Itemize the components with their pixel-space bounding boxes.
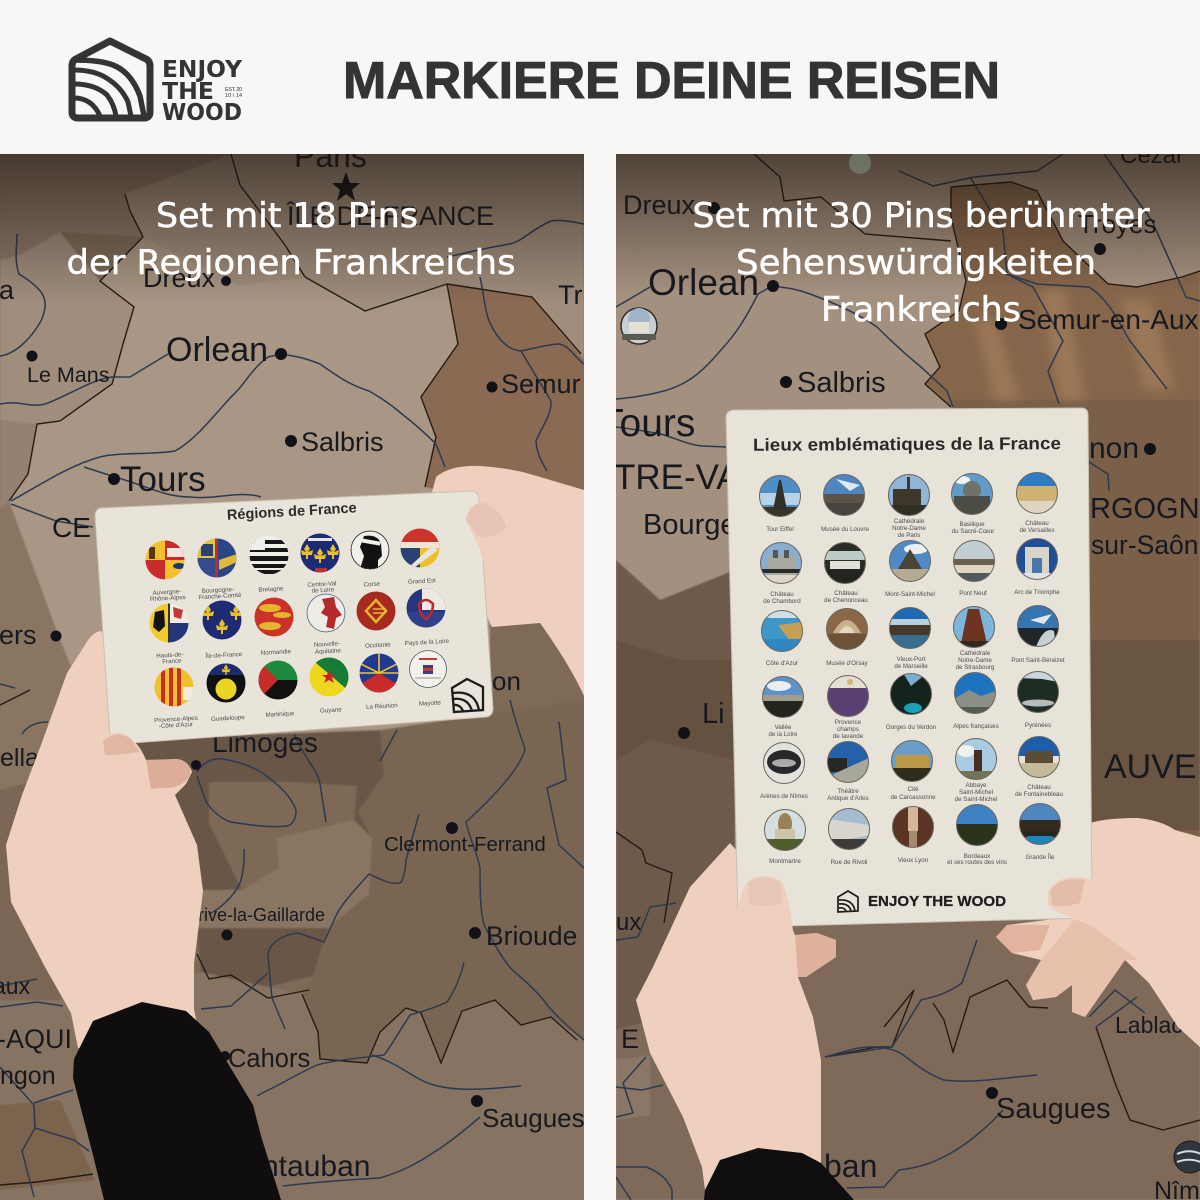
landmark labels: Vieux Lyon [898, 857, 929, 864]
icon: house logo [838, 891, 858, 912]
map labels and city dots: Dreux [623, 190, 696, 220]
wordmark: ENJOY [162, 57, 242, 83]
overlay text, right [692, 196, 1150, 330]
card: Lieux emblématiques de la France [726, 408, 1092, 927]
region labels: Normandie [261, 648, 292, 657]
pin: La Réunion [359, 653, 399, 693]
map pin at lower right [1174, 1141, 1200, 1173]
pin: Montmartre [764, 809, 806, 851]
map labels and city dots: Semur-en-Aux [1018, 304, 1199, 335]
map labels and city dots: AUVE [1104, 748, 1197, 786]
wordmark: THE [162, 79, 214, 105]
landmark labels: Château [770, 591, 794, 598]
map labels and city dots [0, 138, 585, 1183]
map labels and city dots: E [621, 1024, 639, 1054]
landmark labels: de Marseille [894, 663, 928, 670]
region labels: Franche-Comté [198, 592, 242, 601]
landmark labels: Vallée [775, 724, 792, 731]
overlay text, right: Set mit 30 Pins berühmter [692, 196, 1150, 236]
landmark labels: Notre-Dame [892, 525, 926, 532]
pin: Musée d'Orsay [826, 608, 868, 650]
region labels: Grand Est [408, 577, 436, 586]
panel: right photo, landmark pin set [600, 142, 1200, 1200]
map labels and city dots: Tr [558, 280, 582, 310]
landmark labels: Arènes de Nîmes [760, 793, 808, 800]
landmark labels: Côte d'Azur [766, 660, 798, 667]
landmark labels: Cathédrale [894, 518, 925, 525]
map labels and city dots: Dreux [143, 263, 216, 293]
map labels and city dots: Semur [501, 369, 581, 399]
landmark labels: Vieux-Port [897, 656, 926, 663]
overlay text, left: Set mit 18 Pins [156, 196, 418, 236]
map labels and city dots: Lablac [1115, 1012, 1183, 1038]
region labels: Île-de-France [204, 651, 243, 660]
pin: Théâtre Antique d'Arles [827, 741, 869, 783]
region labels: Provence-Alpes [154, 715, 198, 724]
thumb over card, right [466, 502, 506, 563]
pin: Nouvelle-Aquitaine [306, 593, 346, 633]
pin: Cathédrale Notre-Dame de Paris [888, 474, 930, 516]
landmark labels: Antique d'Arles [827, 795, 869, 802]
pin: Vallée de la Loire [762, 676, 804, 718]
landmark labels: de lavande [833, 733, 864, 740]
map labels and city dots: Saugues [996, 1093, 1110, 1125]
pin: Basilique du Sacré-Cœur [951, 473, 993, 516]
brand name: ENJOY THE WOOD [868, 893, 1006, 910]
card footer logo [838, 891, 1006, 912]
right thumb over card [1048, 877, 1200, 1047]
map labels and city dots: Salbris [797, 367, 886, 399]
map labels and city dots: Clermont-Ferrand [384, 833, 546, 856]
landmark labels: Musée du Louvre [821, 526, 869, 533]
pin: Hauts-de-France [149, 603, 189, 643]
landmark labels: Cité [907, 786, 919, 793]
right hand behind card [996, 818, 1200, 1047]
pin: Château de Chambord [760, 542, 802, 584]
pin: Pyrénées [1017, 671, 1059, 713]
pin: Martinique [258, 660, 298, 700]
map labels and city dots: ella [0, 744, 39, 772]
landmark labels: Rue de Rivoli [831, 859, 867, 866]
wordmark: WOOD [162, 100, 242, 126]
map labels and city dots: ban [824, 1148, 877, 1184]
pin: Pays de la Loire [406, 588, 446, 628]
map pin at top [849, 152, 871, 174]
landmark labels: de Carcassonne [890, 794, 936, 801]
landmark labels: Grande Île [1026, 854, 1055, 861]
pin: Abbaye de Saint-Michel [955, 738, 997, 780]
title: MARKIERE DEINE REISEN [343, 52, 1000, 110]
left thumb over card [717, 876, 798, 1010]
map labels and city dots: ÎLE-DE-FRANCE [286, 200, 494, 231]
landmark labels: du Sacré-Cœur [952, 528, 994, 535]
map labels and city dots: Limoges [212, 727, 318, 758]
pin: Occitanie [356, 591, 396, 631]
logo: Enjoy the Wood [72, 41, 242, 126]
map labels and city dots: Troyes [1078, 209, 1156, 239]
region labels: Hauts-de- [156, 651, 184, 660]
landmark pins [759, 472, 1061, 851]
landmark labels: Château [834, 590, 858, 597]
landmark labels: Arc de Triomphe [1014, 589, 1060, 596]
region labels: Rhône-Alpes [150, 594, 186, 603]
upper hand holding card [430, 466, 584, 696]
landmark labels: Bordeaux [964, 853, 991, 860]
landmark labels: Mont-Saint-Michel [885, 591, 935, 598]
landmark labels: Pyrénées [1025, 722, 1051, 729]
overlay text, left [66, 196, 516, 283]
landmark labels: de Chambord [763, 598, 801, 605]
region labels: Occitanie [365, 641, 392, 650]
landmark labels: et ses routes des vins [947, 859, 1007, 866]
thumb over card, left [103, 732, 151, 790]
landmark labels: Montmartre [769, 858, 801, 865]
map labels and city dots: Brive-la-Gaillarde [186, 905, 325, 925]
map labels and city dots: on [492, 666, 521, 696]
map labels and city dots: Cézar [1120, 142, 1184, 169]
landmark labels: de Fontainebleau [1015, 791, 1063, 798]
landmark labels: Cathédrale [960, 650, 991, 657]
region labels: Corse [363, 581, 381, 588]
pin: Mayotte [408, 649, 448, 689]
lower hand and black sleeve [6, 631, 281, 1200]
pin: Château de Chenonceau [824, 542, 866, 584]
map labels and city dots: ntauban [262, 1150, 370, 1183]
region labels: Pays de la Loire [405, 638, 450, 647]
rivers [616, 154, 1200, 1200]
landmark labels: de Strasbourg [956, 664, 995, 671]
map labels and city dots: Brioude [486, 921, 577, 951]
landmark labels: Saint-Michel [959, 789, 993, 796]
map labels and city dots [600, 142, 1200, 1200]
region labels: Bretagne [258, 585, 284, 594]
region labels: Martinique [265, 710, 295, 719]
map labels and city dots: Tours [120, 460, 206, 499]
wooden map background [616, 154, 1200, 1200]
wordmark: EST. 20 [225, 87, 242, 93]
rivers [0, 220, 584, 1197]
region labels: Guadeloupe [211, 714, 246, 723]
map labels and city dots: Orlean [648, 262, 759, 303]
pin: Cathédrale de Strasbourg [953, 606, 995, 648]
map labels and city dots: CE [52, 512, 91, 543]
map labels and city dots: Orlean [166, 331, 268, 369]
map labels and city dots: Bourge [643, 509, 737, 541]
pin: Château de Versailles [1016, 472, 1058, 514]
pin: Bordeaux [956, 804, 998, 846]
pin: Château de Fontainebleau [1018, 736, 1060, 778]
pin: Gorges du Verdon [890, 673, 932, 715]
map labels and city dots: Le Mans [27, 363, 109, 387]
landmark labels: Théâtre [837, 788, 859, 795]
map labels and city dots: RGOGN [1090, 493, 1200, 525]
left hand behind card [636, 843, 854, 1200]
pin: Alpes françaises [954, 672, 996, 714]
overlay text, left: der Regionen Frankreichs [66, 243, 516, 283]
landmark labels: de la Loire [769, 731, 798, 738]
wordmark: 10 \ 14 [225, 93, 242, 99]
landmark labels: Basilique [959, 521, 985, 528]
pin: Côte d'Azur [761, 610, 803, 652]
pin: Bretagne [249, 535, 289, 575]
pin: Tour Eiffel [759, 475, 801, 517]
map labels and city dots: ngon [0, 1062, 56, 1090]
pin: Guyane [309, 657, 349, 697]
landmark labels: Château [1027, 784, 1051, 791]
landmark labels: Alpes françaises [953, 723, 999, 730]
region labels: de Loire [312, 586, 335, 595]
pin: Arènes de Nîmes [763, 742, 805, 784]
icon: wooden house [72, 41, 150, 118]
landmark labels: Tour Eiffel [766, 526, 794, 533]
top vignette [0, 154, 584, 304]
pin rings [760, 472, 1060, 850]
pin: Mont-Saint-Michel [889, 540, 931, 582]
map labels and city dots: non [1089, 432, 1139, 465]
region labels: Mayotte [419, 699, 442, 708]
map labels and city dots: Salbris [301, 427, 384, 457]
region labels [150, 577, 450, 730]
map labels and city dots: Cahors [228, 1045, 310, 1073]
map labels and city dots: Paris [294, 138, 367, 174]
pin: Cité de Carcassonne [891, 740, 933, 782]
landmark labels: Gorges du Verdon [886, 724, 937, 731]
map labels and city dots: Saugues [482, 1103, 585, 1133]
map labels and city dots: Li [702, 698, 725, 730]
region labels: France [162, 657, 182, 666]
landmark labels: Pont Saint-Bénézet [1011, 657, 1065, 664]
card: Régions de France [95, 491, 493, 744]
pin: Normandie [254, 597, 294, 637]
region labels: -Côte d'Azur [159, 721, 193, 730]
landmark labels: Abbaye [966, 782, 987, 789]
region labels: Auvergne- [152, 588, 181, 597]
pin: Rue de Rivoli [828, 808, 870, 850]
landmark labels: Pont Neuf [959, 590, 987, 597]
pin: Grand Est [400, 528, 440, 568]
region labels: Bourgogne- [202, 586, 234, 595]
landmark labels: de Paris [898, 532, 920, 539]
region borders [616, 154, 1200, 1130]
landmark labels: de Chenonceau [824, 597, 868, 604]
landmark labels [760, 518, 1065, 866]
landmark labels: Provence [835, 719, 862, 726]
landmark labels: champs [837, 726, 859, 733]
top vignette [616, 154, 1200, 294]
wooden map background [0, 154, 584, 1200]
wood grain streaks [975, 290, 1175, 400]
region labels: Centre-Val [307, 580, 337, 589]
region borders [0, 154, 581, 1185]
region labels: Guyane [320, 706, 342, 715]
pin: Corse [350, 530, 390, 570]
card title: Lieux emblématiques de la France [753, 433, 1061, 455]
pin: Vieux-Port de Marseille [889, 607, 931, 649]
overlay text, right: Frankreichs [821, 290, 1021, 330]
landmark labels: Notre-Dame [958, 657, 992, 664]
pin: Arc de Triomphe [1016, 538, 1058, 580]
map labels and city dots: ux [616, 909, 641, 936]
pin: Auvergne-Rhône-Alpes [145, 540, 185, 580]
pin: Centre-Val de Loire [300, 533, 340, 573]
panel: left photo, regions pin set [0, 138, 585, 1200]
landmark labels: Château [1025, 520, 1049, 527]
map labels and city dots: TRE-VA [614, 458, 740, 497]
pin: Pont Neuf [953, 540, 995, 582]
pin: Grande Île [1019, 803, 1061, 845]
overlay text, right: Sehenswürdigkeiten [736, 243, 1096, 283]
region labels: Nouvelle- [314, 640, 340, 649]
pin: Guadeloupe [206, 663, 246, 703]
landmark labels: Musée d'Orsay [826, 660, 869, 667]
map labels and city dots: ers [0, 620, 37, 650]
pin: Pont Saint-Bénézet [1017, 605, 1059, 647]
map pin on wood [621, 308, 657, 344]
card title: Régions de France [227, 500, 357, 524]
region labels: La Réunion [366, 702, 398, 711]
pin: Provence-Alpes-Côte d'Azur [154, 667, 194, 707]
region labels: Aquitaine [315, 647, 342, 656]
landmark labels: de Saint-Michel [955, 796, 997, 803]
landmark labels: de Versailles [1019, 527, 1055, 534]
pin: Bourgogne-Franche-Comté [197, 538, 237, 578]
pin: Musée du Louvre [823, 474, 865, 516]
map labels and city dots: Tours [600, 402, 695, 445]
icon: card logo [452, 679, 483, 712]
pin: Île-de-France [202, 600, 242, 640]
wordmark [162, 57, 242, 126]
map labels and city dots: sur-Saôn [1091, 530, 1199, 560]
pin: Provence champs de lavande [827, 675, 869, 717]
pin: Vieux Lyon [892, 806, 934, 848]
